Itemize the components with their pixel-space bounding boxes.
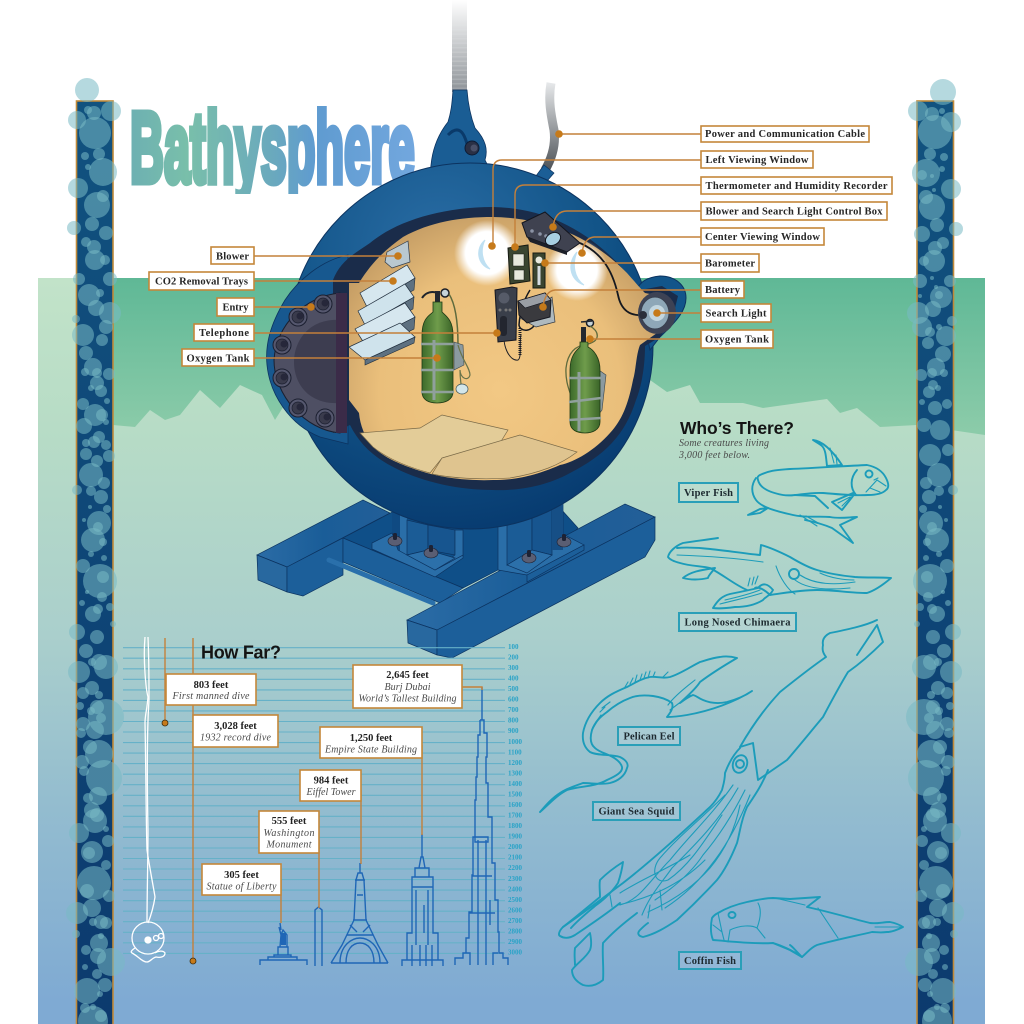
suspension cable: [452, 0, 467, 92]
depth scale: 1500: [508, 790, 522, 798]
callout: thermometer and humidity recorder: [511, 177, 892, 251]
depth scale: 1200: [508, 759, 522, 767]
cabin interior: [349, 217, 670, 480]
stand: [257, 500, 655, 658]
left oxygen tank: [421, 289, 470, 403]
chart heading: How Far?: [201, 642, 281, 662]
depth scale: 200: [508, 654, 519, 662]
callout: oxygen tank right: Oxygen Tank: [705, 334, 769, 346]
center viewing window: [546, 239, 608, 301]
right oxygen tank: [566, 320, 606, 433]
callout: battery: [539, 281, 744, 311]
callout: search light: Search Light: [706, 308, 767, 320]
callout: barometer: [541, 254, 759, 272]
tray 3: [355, 303, 415, 354]
heading: who's there: 3,000 feet below.: [678, 450, 750, 461]
label: pelican eel: [618, 727, 680, 745]
communication cable: [533, 83, 555, 188]
depth scale: 2200: [508, 864, 522, 872]
callout: 803 feet: [166, 674, 256, 705]
callout: control box: [549, 202, 887, 231]
title: Bathysphere: [130, 93, 415, 204]
callout: oxygen tank right: [586, 330, 773, 348]
callout: 984 feet: [300, 770, 361, 801]
depth grid lines: [123, 648, 505, 953]
left skid: [257, 500, 390, 596]
tray 2: [358, 284, 414, 336]
callout: thermometer and humidity recorder: Thermometer and Humidity Recorder: [706, 181, 888, 192]
telephone: [495, 287, 521, 360]
leader: eiffel tower: [360, 790, 362, 864]
right bracket: [498, 503, 584, 582]
depth scale: 1600: [508, 801, 522, 809]
callout: 3,028 feet: 3,028 feet: [214, 721, 257, 732]
search light: [638, 292, 676, 334]
water background: [38, 278, 985, 1024]
label: coffin fish: [679, 952, 741, 969]
coffin fish: [711, 897, 903, 957]
depth scale: 2300: [508, 875, 522, 883]
burj dubai: [455, 687, 508, 965]
depth scale: 2400: [508, 886, 522, 894]
how far chart: [123, 637, 522, 966]
label: giant sea squid: Giant Sea Squid: [598, 806, 675, 818]
callout: blower: [211, 247, 402, 264]
depth scale: 800: [508, 716, 519, 724]
callout: 1,250 feet: [320, 727, 422, 758]
callout: oxygen tank left: [182, 349, 441, 366]
callout: 984 feet: Eiffel Tower: [306, 787, 356, 798]
depth scale: 2900: [508, 938, 522, 946]
depth scale: 1700: [508, 812, 522, 820]
long nosed chimaera: [668, 538, 891, 608]
left bracket: [372, 510, 463, 577]
callout: telephone: Telephone: [199, 328, 249, 339]
battery: [518, 290, 555, 330]
callout: center viewing window: Center Viewing Window: [705, 232, 820, 243]
right bubble pillar: [905, 79, 964, 1024]
tray 1: [360, 265, 415, 317]
callout: 3,028 feet: 1932 record dive: [200, 732, 272, 744]
leader: statue of liberty: [280, 880, 282, 923]
leader: burj dubai: [460, 687, 482, 690]
leader: empire state building: [421, 745, 423, 835]
leader: washington monument: [318, 840, 320, 908]
left callouts: [149, 247, 501, 366]
callout: left viewing window: [488, 151, 813, 250]
right skid: [407, 504, 655, 658]
depth scale: 1900: [508, 832, 522, 840]
lifting lug: [424, 90, 500, 205]
left viewing window: [454, 220, 520, 286]
blower: [385, 241, 410, 268]
depth scale: 100: [508, 643, 519, 651]
callout: 803 feet: 803 feet: [194, 680, 229, 691]
depth scale: 900: [508, 727, 519, 735]
dive line: 803 feet: [162, 638, 168, 726]
base block: [343, 508, 578, 603]
empire state building: [402, 834, 443, 966]
depth scale: 2100: [508, 854, 522, 862]
washington monument: [315, 907, 322, 966]
depth scale: 2700: [508, 917, 522, 925]
callout: center viewing window: [578, 228, 824, 257]
control box: [522, 212, 580, 255]
callout: search light: [653, 304, 771, 322]
depth scale: 2800: [508, 928, 522, 936]
search light cable: [580, 243, 642, 315]
callout: power and communication cable: [555, 126, 869, 142]
viper fish: [748, 440, 888, 543]
depth scale: 2600: [508, 906, 522, 914]
callout: entry: Entry: [222, 302, 249, 314]
eiffel tower: [331, 863, 388, 963]
dive line: 3,028 feet: [190, 638, 196, 964]
depth scale: 500: [508, 685, 519, 693]
thermometer and humidity recorder: [508, 245, 530, 284]
callout: left viewing window: Left Viewing Window: [706, 155, 809, 166]
depth scale: 1000: [508, 738, 522, 746]
callout: CO2 removal trays: [149, 272, 397, 290]
depth scale: 1800: [508, 822, 522, 830]
depth scale: 600: [508, 696, 519, 704]
entry door: [273, 293, 347, 433]
callout: battery: Battery: [705, 285, 741, 296]
pelican eel: [540, 656, 752, 812]
callout: 305 feet: Statue of Liberty: [206, 882, 277, 892]
label: giant sea squid: [593, 802, 680, 820]
tray 4: [349, 323, 415, 365]
right callouts: [488, 126, 892, 348]
callout: 2,645 feet: [353, 665, 462, 708]
depth scale: 2500: [508, 896, 522, 904]
callout: power and communication cable: Power and Communication Cable: [705, 129, 865, 140]
callout: control box: Blower and Search Light Control Box: [706, 206, 883, 218]
depth scale: 2000: [508, 843, 522, 851]
barometer: [533, 253, 545, 288]
heading: who's there: [678, 418, 794, 461]
inner wall: [333, 207, 678, 490]
label: long nosed chimaera: Long Nosed Chimaera: [684, 618, 791, 628]
callout: entry: [217, 298, 315, 316]
depth scale: 700: [508, 706, 519, 714]
callout: 984 feet: 984 feet: [314, 776, 349, 786]
giant sea squid: [559, 620, 883, 986]
label: coffin fish: Coffin Fish: [684, 956, 736, 967]
depth scale: 1300: [508, 770, 522, 778]
depth scale: 1100: [508, 748, 522, 756]
callout: 555 feet: Monument: [266, 840, 312, 850]
heading: who's there: Some creatures living: [679, 438, 769, 449]
blower and trays: [349, 241, 415, 365]
callout: 305 feet: 305 feet: [224, 870, 259, 881]
callout: telephone: [194, 324, 501, 341]
callout: CO2 removal trays: CO2 Removal Trays: [155, 276, 248, 288]
depth scale: [508, 643, 522, 956]
cabin floor: [360, 415, 577, 479]
heading: who's there: Who’s There?: [680, 418, 794, 438]
depth scale: 3000: [508, 948, 522, 956]
callout: blower: Blower: [216, 252, 249, 262]
left bubble pillar: [66, 78, 125, 1024]
callout: 555 feet: [259, 811, 319, 853]
search light housing: [637, 276, 686, 350]
door flange: [267, 255, 348, 444]
callout: 305 feet: [202, 864, 281, 895]
label: pelican eel: Pelican Eel: [624, 732, 675, 742]
depth scale: 1400: [508, 780, 522, 788]
depth scale: 300: [508, 664, 519, 672]
callout: 1,250 feet: Empire State Building: [324, 744, 417, 756]
callout: 803 feet: First manned dive: [172, 691, 250, 702]
callout: 3,028 feet: [193, 715, 278, 747]
label: long nosed chimaera: [679, 613, 796, 631]
callout: 1,250 feet: 1,250 feet: [350, 733, 393, 744]
callout: 2,645 feet: World’s Tallest Building: [358, 694, 456, 704]
depth scale: 400: [508, 674, 519, 682]
bathysphere body: [267, 83, 686, 529]
statue of liberty: [260, 923, 307, 965]
callout: oxygen tank left: Oxygen Tank: [186, 354, 250, 364]
callout: barometer: Barometer: [705, 258, 755, 270]
callout: 555 feet: 555 feet: [272, 816, 307, 827]
callout: 555 feet: Washington: [264, 828, 314, 839]
label: viper fish: [679, 483, 738, 502]
cross rod: [329, 560, 433, 603]
label: viper fish: Viper Fish: [684, 488, 733, 499]
diver sphere and cable: [131, 637, 165, 962]
callout: 2,645 feet: Burj Dubai: [384, 682, 431, 693]
callout: 2,645 feet: 2,645 feet: [386, 670, 429, 681]
outer hull: [287, 163, 653, 529]
